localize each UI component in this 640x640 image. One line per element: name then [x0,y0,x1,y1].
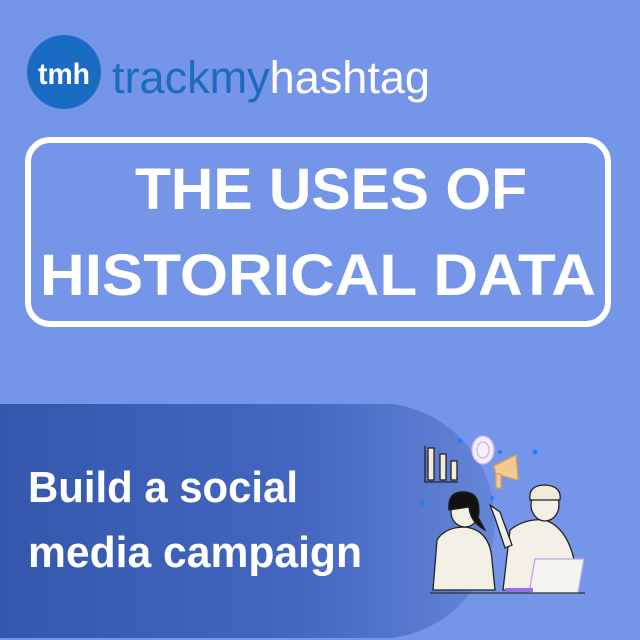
title box [28,140,608,324]
desk line [430,592,585,594]
illustration: two people with laptop [425,436,585,593]
sparkles [420,438,538,506]
icon: tmh circle: tmh [38,58,90,91]
logo wordmark: trackmyhashtag [112,52,430,103]
title line 2: HISTORICAL DATA [40,243,596,308]
subtitle text: Build a social [28,463,298,512]
icon: megaphone [494,455,518,488]
subtitle text [28,463,362,577]
icon: laptop [505,559,584,593]
panel: bottom dark capsule [0,404,495,638]
icon: target [472,436,494,464]
person left [433,492,495,590]
icon: tmh circle [27,35,101,109]
logo [27,35,430,109]
title line 1: THE USES OF [135,157,527,222]
person right [490,485,578,590]
subtitle text: media campaign [28,528,362,577]
icon: bar chart [425,446,458,482]
